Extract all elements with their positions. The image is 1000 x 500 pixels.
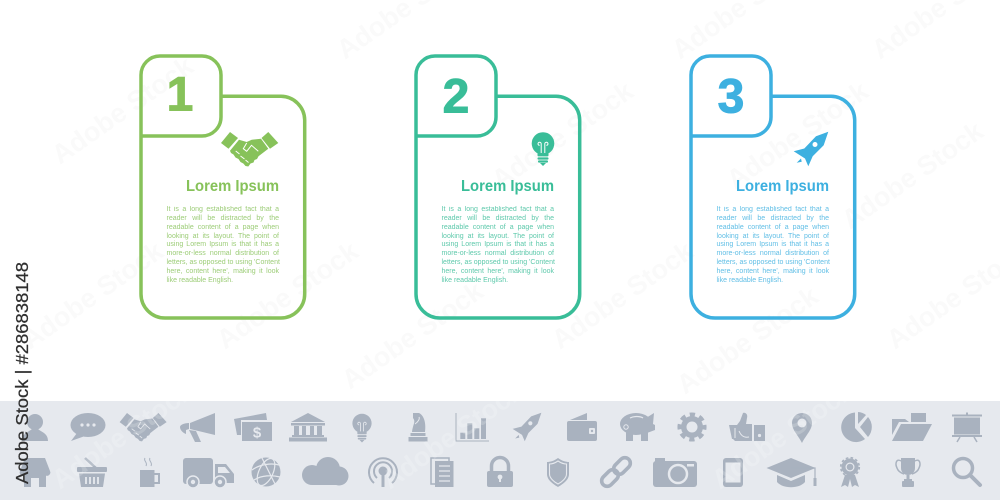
icon: piggy bank [620,413,655,441]
icon: shop [20,458,50,487]
watermark: Adobe Stock pattern: Adobe Stock [46,50,199,170]
text block: here, content here', making it look [166,268,279,275]
text block: It is a long established fact that a [442,206,554,213]
card outline [416,56,580,318]
icon: pie chart [841,412,872,442]
text block: using Lorem Ipsum is that it has a [716,241,829,248]
number 3: 3 [718,70,744,124]
icon: light bulb [352,414,372,442]
text block: more-or-less normal distribution of [716,250,829,257]
text block [442,206,555,284]
icon: smartphone [723,458,743,487]
watermark: Adobe Stock pattern: Adobe Stock [546,235,699,355]
watermark: Adobe Stock pattern: Adobe Stock [836,115,989,235]
icon: light bulb [532,132,554,166]
icon: award ribbon [841,458,859,487]
text block: here, content here', making it look [716,268,829,275]
credit: vertical stock id: Adobe Stock | #286838148 [12,262,32,484]
icon: graduation cap [766,458,816,487]
icon: delivery truck [183,458,234,488]
icon: banknotes: $ [253,424,262,442]
icon: handshake [120,413,167,441]
text block: here, content here', making it look [442,268,554,275]
heading: Lorem Ipsum [186,178,279,195]
icon: bar chart [456,413,489,441]
icon: rocket [513,413,541,441]
text block: more-or-less normal distribution of [166,250,279,257]
text block: It is a long established fact that a [166,206,279,213]
watermark: Adobe Stock pattern: Adobe Stock [336,275,489,395]
card outline [141,56,305,318]
icon: magnifying glass [954,458,980,485]
text block: more-or-less normal distribution of [442,250,554,257]
text block: reader will be distracted by the [166,215,279,222]
watermark: Adobe Stock pattern: Adobe Stock [211,235,364,355]
panel: card 3 [689,54,856,320]
icon: handshake [221,132,278,166]
text block: reader will be distracted by the [716,215,829,222]
watermark: Adobe Stock pattern: Adobe Stock [486,75,639,195]
icon: cloud [302,457,348,486]
text block [166,206,280,284]
icon: gear [680,415,704,439]
icon: chain link [599,455,633,489]
text block: letters, as opposed to using 'Content [716,259,830,266]
icon: megaphone [180,413,215,442]
icon: banknotes [234,413,272,442]
text block: readable content of a page when [442,224,554,231]
text block: looking at its layout. The point of [442,233,554,240]
text block: It is a long established fact that a [716,206,829,213]
text block: letters, as opposed to using 'Content [166,259,280,266]
icon: basket [77,458,107,487]
icon: presentation board [952,412,982,442]
watermark: band overlay: Adobe Stock [376,375,529,495]
icon: globe [252,456,280,488]
icon: shield [547,458,569,487]
watermark: band overlay: Adobe Stock [706,375,859,495]
icon: coffee cup [140,458,159,487]
text block: like readable English. [166,277,233,284]
number 1: 1 [167,68,193,122]
text block [716,206,830,284]
icon: bank [289,413,327,442]
watermark: Adobe Stock pattern: Adobe Stock [671,280,824,400]
panel: card 2 [414,54,582,320]
card outline [691,56,855,318]
icon: rocket [794,132,828,166]
icon: person [22,414,48,441]
icon: trophy [896,458,920,487]
icon: map pin [792,413,812,443]
text block: like readable English. [716,277,783,284]
heading: Lorem Ipsum [461,178,554,195]
icon: wallet [567,413,597,441]
number 2: 2 [443,70,469,124]
text block: looking at its layout. The point of [716,233,829,240]
icon: folder [892,413,932,441]
text block: readable content of a page when [716,224,829,231]
icon: speech bubble [70,413,106,441]
text block: reader will be distracted by the [442,215,554,222]
text block: using Lorem Ipsum is that it has a [442,241,554,248]
icon: chess knight [408,413,428,442]
text block: readable content of a page when [166,224,279,231]
icon: broadcast signal [369,458,397,487]
icon: thumbs up [729,413,765,441]
text block: letters, as opposed to using 'Content [442,259,555,266]
watermark: Adobe Stock pattern: Adobe Stock [721,75,874,195]
text block: looking at its layout. The point of [166,233,279,240]
text block: using Lorem Ipsum is that it has a [166,241,279,248]
heading: Lorem Ipsum [736,178,829,195]
icon: documents [431,458,454,487]
watermark: Adobe Stock pattern: Adobe Stock [16,235,169,355]
text block: like readable English. [442,277,508,284]
watermark: band overlay: Adobe Stock [46,375,199,495]
icon: camera [653,458,697,487]
icon: padlock [487,458,513,487]
